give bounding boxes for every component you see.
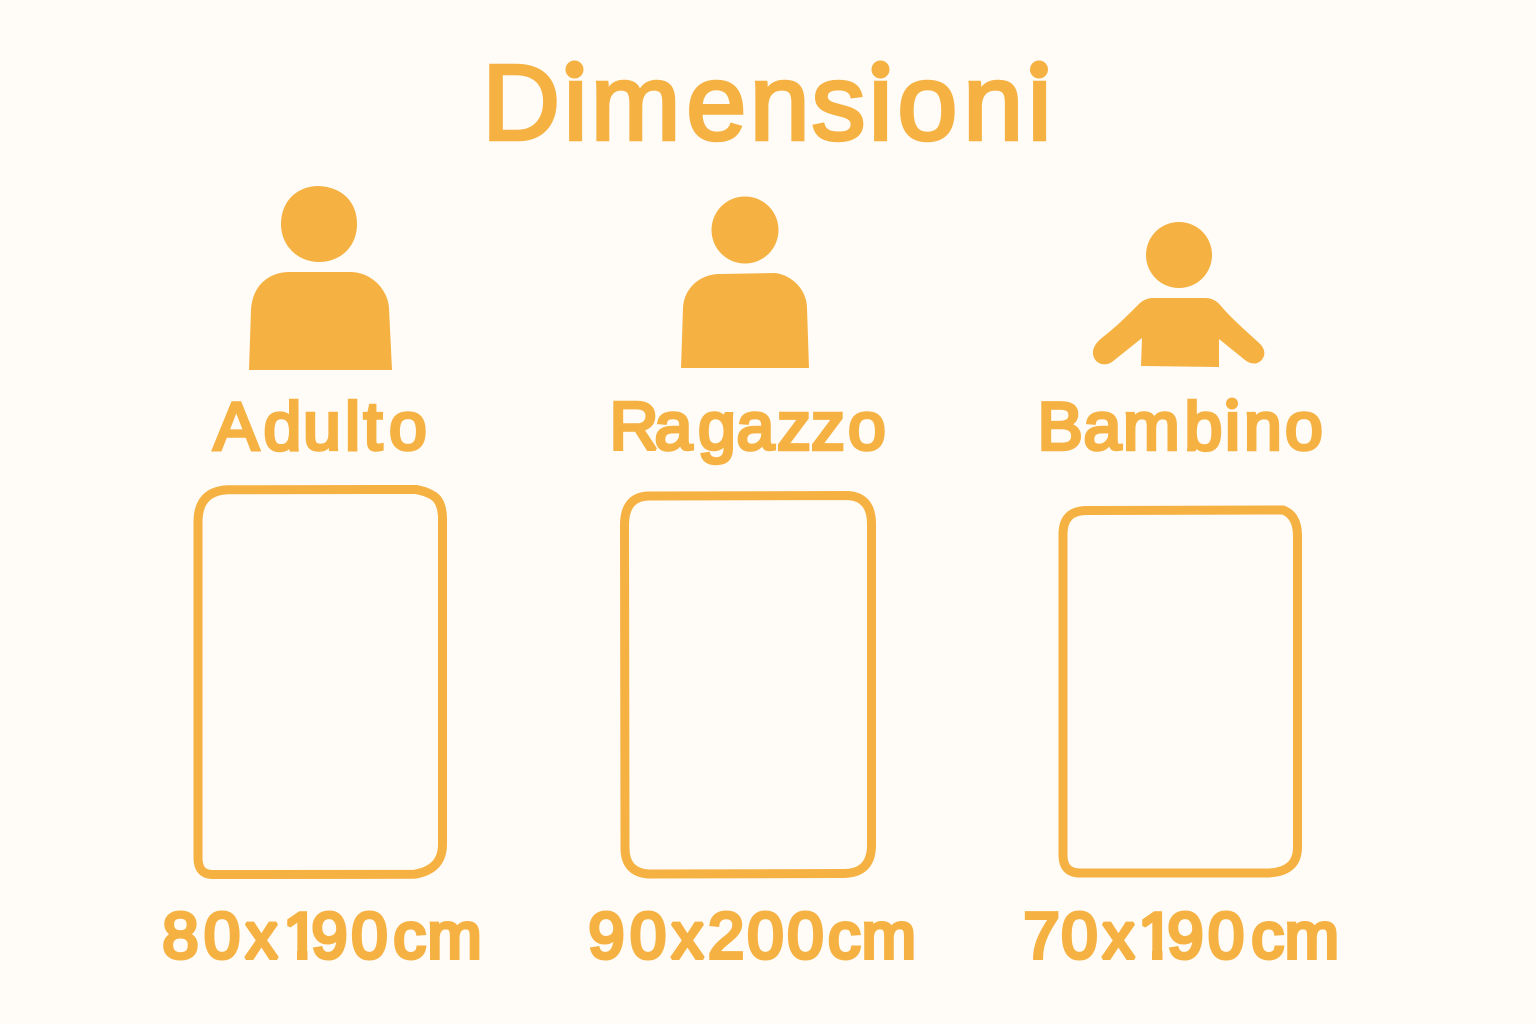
dimensions: Ragazzo: 90x200cm xyxy=(588,899,916,972)
dimensions: Bambino: 90cm xyxy=(1167,899,1339,972)
icon: teen person xyxy=(681,196,809,368)
dimensions: Adulto: 80x1 xyxy=(162,899,319,972)
mattress outline: Adulto xyxy=(198,490,442,874)
label: Ragazzo: Ragazzo xyxy=(610,388,886,464)
column: Adulto xyxy=(162,186,482,972)
column: Ragazzo xyxy=(588,196,916,972)
column: Bambino xyxy=(1024,222,1339,972)
dimensions: Adulto: 90cm xyxy=(311,899,482,972)
icon: adult person xyxy=(249,186,392,370)
mattress outline: Bambino xyxy=(1063,510,1298,873)
icon: child person xyxy=(1093,222,1264,367)
dimensions: Adulto xyxy=(162,899,482,972)
label: Adulto: Adulto xyxy=(214,388,427,464)
title: Dimensioni xyxy=(482,42,1052,162)
label: Bambino: Bambino xyxy=(1038,388,1323,464)
dimensions: Bambino xyxy=(1024,899,1339,972)
mattress outline: Ragazzo xyxy=(624,496,872,874)
dimensions: Bambino: 70x1 xyxy=(1024,899,1174,972)
